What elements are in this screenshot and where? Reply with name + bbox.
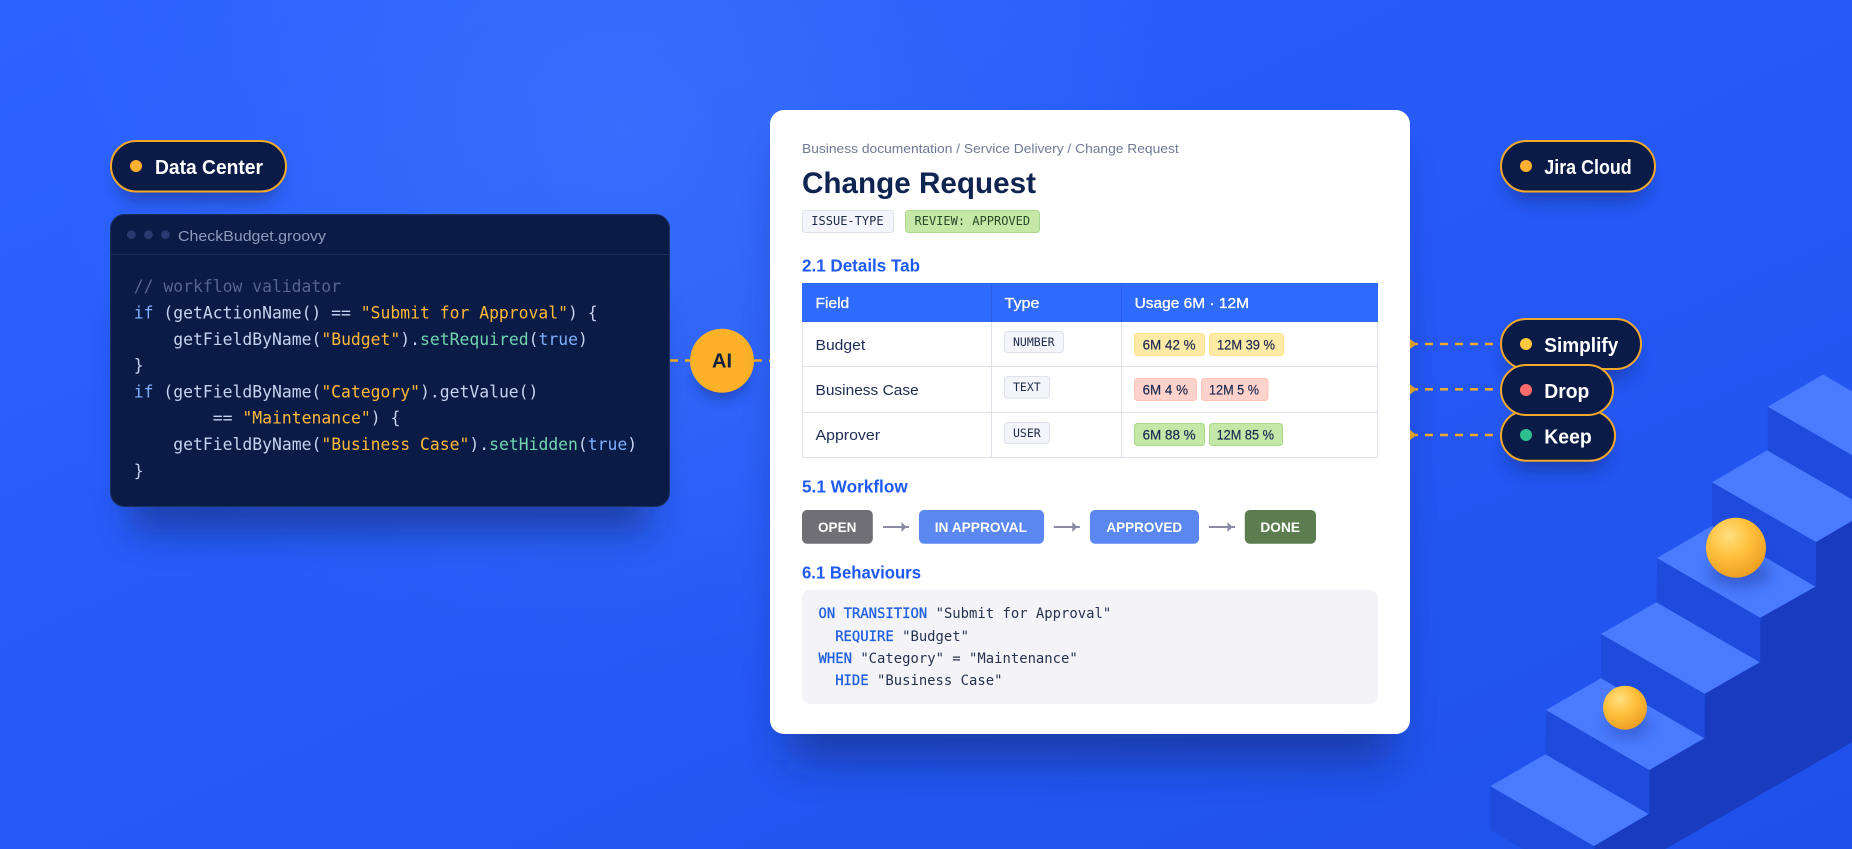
step 5 [1712,450,1852,587]
connector: Drop to document [1410,384,1493,394]
table header: Type [1004,296,1040,312]
sphere shadow: large [1709,559,1771,587]
behaviours code block: REQUIRE "Budget" [835,629,969,645]
connector: Keep to document [1410,430,1493,440]
badge: Jira Cloud [1501,141,1655,200]
row: Budget: 12M 39 % [1217,338,1275,352]
row: Approver: 6M 88 % [1143,428,1196,442]
step 4 [1656,526,1815,662]
step 3 [1601,602,1760,738]
editor title bar: CheckBudget.groovy [178,229,327,245]
row: Business Case: Business Case [816,382,919,399]
behaviours code block: HIDE "Business Case" [835,673,1002,689]
code listing: if (getFieldByName("Category").getValue() [134,382,538,401]
sphere shadow: small [1605,717,1651,737]
behaviours code block: WHEN "Category" = "Maintenance" [818,651,1078,667]
state: OPEN: OPEN [818,519,856,535]
code listing: } [134,356,144,375]
code listing: getFieldByName("Budget").setRequired(true) [173,330,588,349]
AI node [690,329,754,398]
row: Approver: Approver [816,427,880,444]
row: Approver: 12M 85 % [1217,428,1274,442]
editor title bar [111,229,669,254]
panel: Change Request document [770,110,1410,760]
panel: Groovy code editor [110,214,670,532]
code listing [134,277,637,480]
state: APPROVED [1090,510,1199,544]
code listing: == "Maintenance") { [213,409,400,428]
row: Budget: Budget [816,337,866,354]
badge: Data Center [111,141,286,200]
state: IN APPROVAL: IN APPROVAL [935,519,1027,535]
state: DONE: DONE [1260,519,1300,535]
code listing: if (getActionName() == "Submit for Approval") { [134,304,598,322]
document title: Change Request [802,167,1036,200]
code listing: getFieldByName("Business Case").setHidden(true) [173,435,637,454]
illustration: isometric staircase [1490,374,1852,849]
staircase side wall [1594,521,1852,849]
state: OPEN [802,510,873,544]
sphere: large [1706,518,1766,578]
code listing: } [134,461,144,480]
state: APPROVED: APPROVED [1106,519,1182,535]
row: Business Case: TEXT [1013,380,1041,394]
AI node: AI [712,350,732,372]
row: Business Case: 6M 4 % [1143,382,1188,398]
row: Budget: NUMBER [1013,335,1055,349]
badge: Data Center: Data Center [155,157,263,179]
badge: Drop [1501,365,1613,415]
table header: Usage 6M · 12M [1135,296,1249,312]
behaviours code block [802,590,1378,704]
step 6 [1768,374,1852,511]
breadcrumb: Business documentation / Service Delivery / Change Request [802,141,1179,156]
badge: Simplify [1501,319,1641,378]
badge: Jira Cloud: Jira Cloud [1544,157,1632,179]
state: IN APPROVAL [919,510,1044,544]
row: Business Case [816,376,1268,400]
row: Budget [816,332,1284,356]
tag: issue type [802,210,894,232]
tag: review approved: REVIEW: APPROVED [914,214,1030,228]
workflow diagram [802,510,1316,544]
behaviours code block: ON TRANSITION "Submit for Approval" [818,606,1111,622]
heading: 6.1 Behaviours: 6.1 Behaviours [802,562,921,582]
step 2 [1545,678,1704,814]
row: Approver [816,422,1282,446]
connector: AI to document [754,359,771,362]
tag: issue type: ISSUE-TYPE [811,214,884,228]
connector: Simplify to document [1410,339,1493,349]
connector: code to AI [670,359,690,362]
heading: 2.1 Details Tab: 2.1 Details Tab [802,256,920,276]
tag: review approved [906,210,1040,232]
row: Budget: 6M 42 % [1143,338,1196,352]
badge: Keep [1501,411,1615,470]
code listing: // workflow validator [134,277,341,296]
arrow: approved to done [1209,522,1235,532]
arrow: in approval to approved [1054,522,1080,532]
badge: Simplify: Simplify [1544,335,1619,357]
sphere: small [1603,686,1647,730]
arrow: open to in approval [883,522,909,532]
state: DONE [1245,510,1316,544]
badge: Keep: Keep [1544,426,1592,448]
row: Approver: USER [1013,426,1041,440]
heading: 5.1 Workflow: 5.1 Workflow [802,476,908,496]
table header [816,296,1249,312]
step 1 [1490,754,1649,849]
badge: Drop: Drop [1544,381,1589,403]
fields table [802,283,1378,458]
row: Business Case: 12M 5 % [1209,382,1259,398]
table header: Field [816,296,849,312]
